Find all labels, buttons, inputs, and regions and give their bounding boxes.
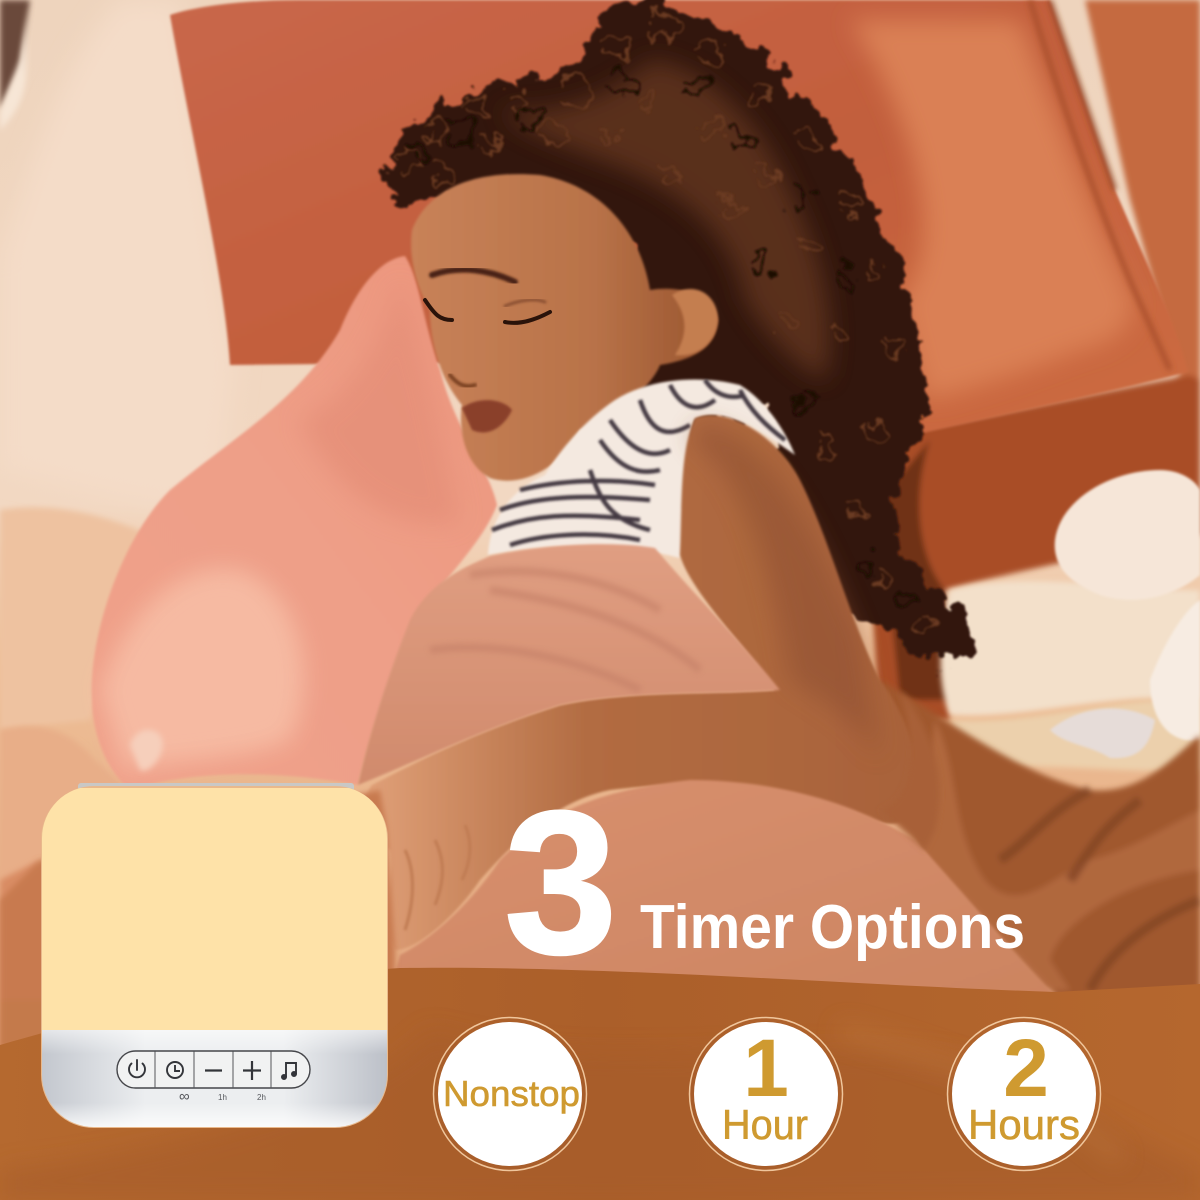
icon: clock	[167, 1062, 183, 1078]
white plush toy and pillow on the right	[941, 470, 1200, 771]
pink blanket over shoulder	[358, 544, 780, 785]
timer option: 2 hours	[948, 1018, 1100, 1170]
timer option: nonstop	[434, 1018, 586, 1170]
product: night-light sound machine	[41, 783, 388, 1128]
base	[42, 1030, 387, 1127]
arm and shoulder	[366, 415, 918, 950]
child's face	[411, 174, 718, 481]
timer labels: ∞	[179, 1088, 190, 1105]
icon: music note	[282, 1063, 296, 1080]
timer option: 2 hours: 2	[1003, 1023, 1049, 1114]
heading: Timer Options: Timer Options	[640, 893, 1025, 962]
timer option: 1 hour: 1	[743, 1023, 789, 1114]
translucent brown bottom band	[0, 968, 1200, 1200]
lower blanket	[390, 690, 1060, 1000]
lamp body	[41, 786, 388, 1128]
hair	[385, 0, 973, 665]
button strip	[117, 1051, 310, 1088]
timer option: nonstop: Nonstop	[443, 1073, 580, 1114]
speaker grille	[78, 783, 354, 793]
timer labels	[179, 1088, 266, 1105]
glowing shade	[42, 788, 387, 1030]
timer option: 1 hour	[690, 1018, 842, 1170]
pink plush pillow	[92, 256, 497, 790]
large orange pillow	[170, 0, 1188, 438]
fingers	[405, 825, 470, 930]
timer labels: 1h	[218, 1093, 227, 1102]
lower-left skin and blanket behind lamp	[0, 790, 395, 1050]
striped top	[488, 380, 795, 558]
ear	[672, 289, 718, 355]
brown blanket on the right	[880, 680, 1200, 1000]
right rear pillow	[860, 0, 1200, 720]
closed eye and brows	[425, 270, 550, 386]
icon: minus	[205, 1069, 222, 1072]
lips	[462, 400, 512, 432]
timer option: 2 hours: Hours	[968, 1101, 1080, 1148]
timer labels: 2h	[257, 1093, 266, 1102]
big numeral 3: 3	[504, 769, 617, 997]
timer option: 1 hour: Hour	[722, 1101, 808, 1148]
icon: plus	[243, 1061, 261, 1080]
icon: power	[129, 1060, 145, 1077]
